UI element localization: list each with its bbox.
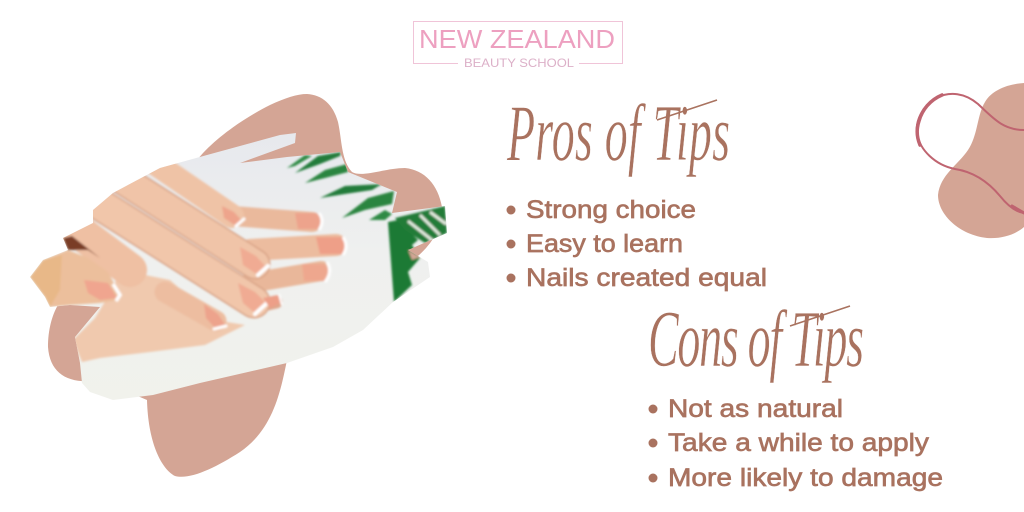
blob: top right decoration xyxy=(938,83,1024,238)
photo: hands with french manicure and fern xyxy=(30,133,447,400)
heading: cons of tips: Cons of Tips xyxy=(648,296,864,384)
nails xyxy=(204,206,346,329)
logo: NEW ZEALAND xyxy=(419,24,615,54)
logo xyxy=(414,22,622,70)
blob: main background shape xyxy=(48,94,442,477)
lower hand and palm xyxy=(73,270,245,362)
list: pros xyxy=(506,196,767,292)
thumb fragment at left xyxy=(30,236,120,307)
list: cons: Take a while to apply xyxy=(668,429,930,457)
list: pros: Strong choice xyxy=(526,196,696,224)
fern leaves xyxy=(287,152,447,302)
lower hand fingers xyxy=(232,216,336,308)
squiggle: top right line xyxy=(917,94,1024,213)
list: cons: Not as natural xyxy=(668,395,843,423)
list: cons: More likely to damage xyxy=(668,464,943,492)
list: cons xyxy=(648,395,943,492)
upper hand fingers xyxy=(70,160,255,321)
heading: pros of tips: Pros of Tips xyxy=(506,90,730,178)
logo: BEAUTY SCHOOL xyxy=(464,56,574,70)
list: pros: Easy to learn xyxy=(526,230,683,258)
list: pros: Nails created equal xyxy=(526,264,767,292)
